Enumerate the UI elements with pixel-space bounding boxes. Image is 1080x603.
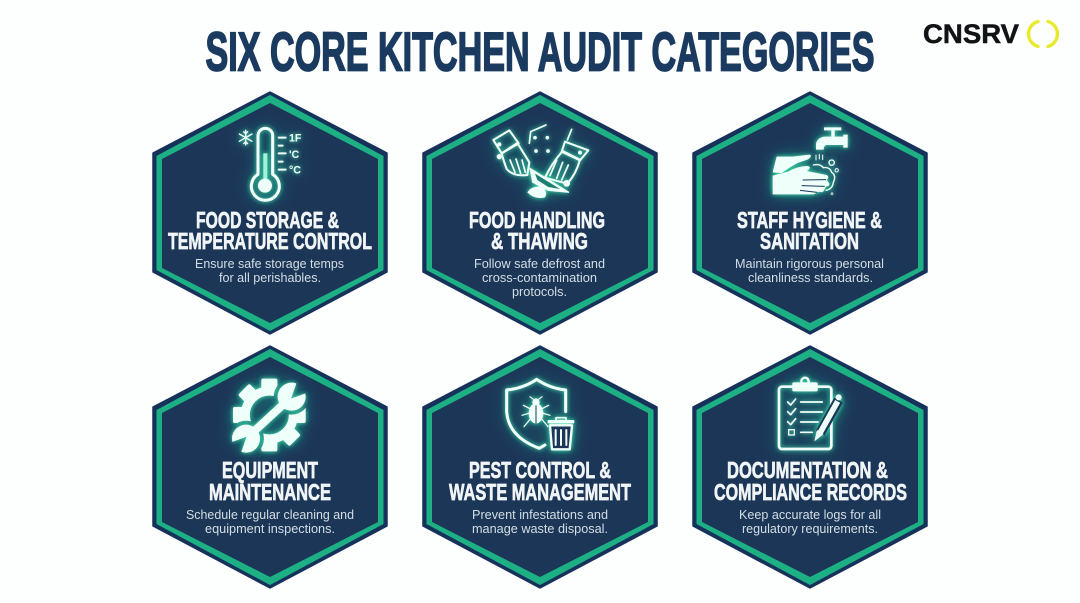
description: Ensure safe storage temps [195,257,344,271]
description: Maintain rigorous personal [735,257,884,271]
description: Prevent infestations and [472,508,608,522]
icon: clipboard checklist with pen [779,378,842,449]
description: regulatory requirements. [742,522,878,536]
description [474,257,605,299]
panel: staff hygiene and sanitation [693,92,927,334]
icon: thermometer with snowflake: °C [289,165,301,177]
heading [168,207,372,254]
heading [209,457,331,505]
icon: thermometer with snowflake: 1F [289,133,302,145]
heading: STAFF HYGIENE & [737,207,882,233]
panel: food storage and temperature control [153,92,387,334]
heading: & THAWING [491,228,588,254]
description [195,257,344,285]
description [739,508,881,536]
description: protocols. [512,285,567,299]
heading: SANITATION [760,228,859,254]
heading: DOCUMENTATION & [727,457,888,483]
description: cross-contamination [482,271,597,285]
description: Keep accurate logs for all [739,508,881,522]
heading: COMPLIANCE RECORDS [714,479,907,505]
hexagon badge [423,92,657,334]
description: Schedule regular cleaning and [186,508,354,522]
heading [737,207,882,254]
heading: TEMPERATURE CONTROL [168,228,372,254]
heading: WASTE MANAGEMENT [449,479,631,505]
icon: gloved hands cutting food [493,125,588,198]
hexagon badge [153,92,387,334]
heading [469,207,605,254]
logo: CNSRV [923,19,1057,49]
heading: PEST CONTROL & [469,457,611,483]
heading: FOOD STORAGE & [196,207,339,233]
hexagon badge [423,346,657,588]
panel: food handling and thawing [423,92,657,334]
description: Follow safe defrost and [474,257,605,271]
logo ring [1029,22,1057,46]
heading [714,457,907,505]
hexagon badge [693,346,927,588]
heading: EQUIPMENT [222,457,318,483]
heading: MAINTENANCE [209,479,331,505]
panel: documentation and compliance records [693,346,927,588]
hexagon badge [153,346,387,588]
description [472,508,608,536]
icon: thermometer with snowflake: 'C [289,149,300,161]
infographic canvas [152,20,1060,589]
panel: equipment maintenance [153,346,387,588]
description [186,508,354,536]
description: equipment inspections. [205,522,335,536]
panel: pest control and waste management [423,346,657,588]
logo wordmark: CNSRV [923,19,1019,49]
icon: hands washing under faucet [773,127,848,195]
description: cleanliness standards. [748,271,873,285]
icon: gear and wrench [232,379,306,453]
icon: shield with bug and trash bin [507,379,574,449]
description: manage waste disposal. [472,522,608,536]
description: for all perishables. [219,271,321,285]
heading [449,457,631,505]
icon: thermometer with snowflake [239,128,302,200]
description [735,257,884,285]
heading: FOOD HANDLING [469,207,605,233]
hexagon badge [693,92,927,334]
